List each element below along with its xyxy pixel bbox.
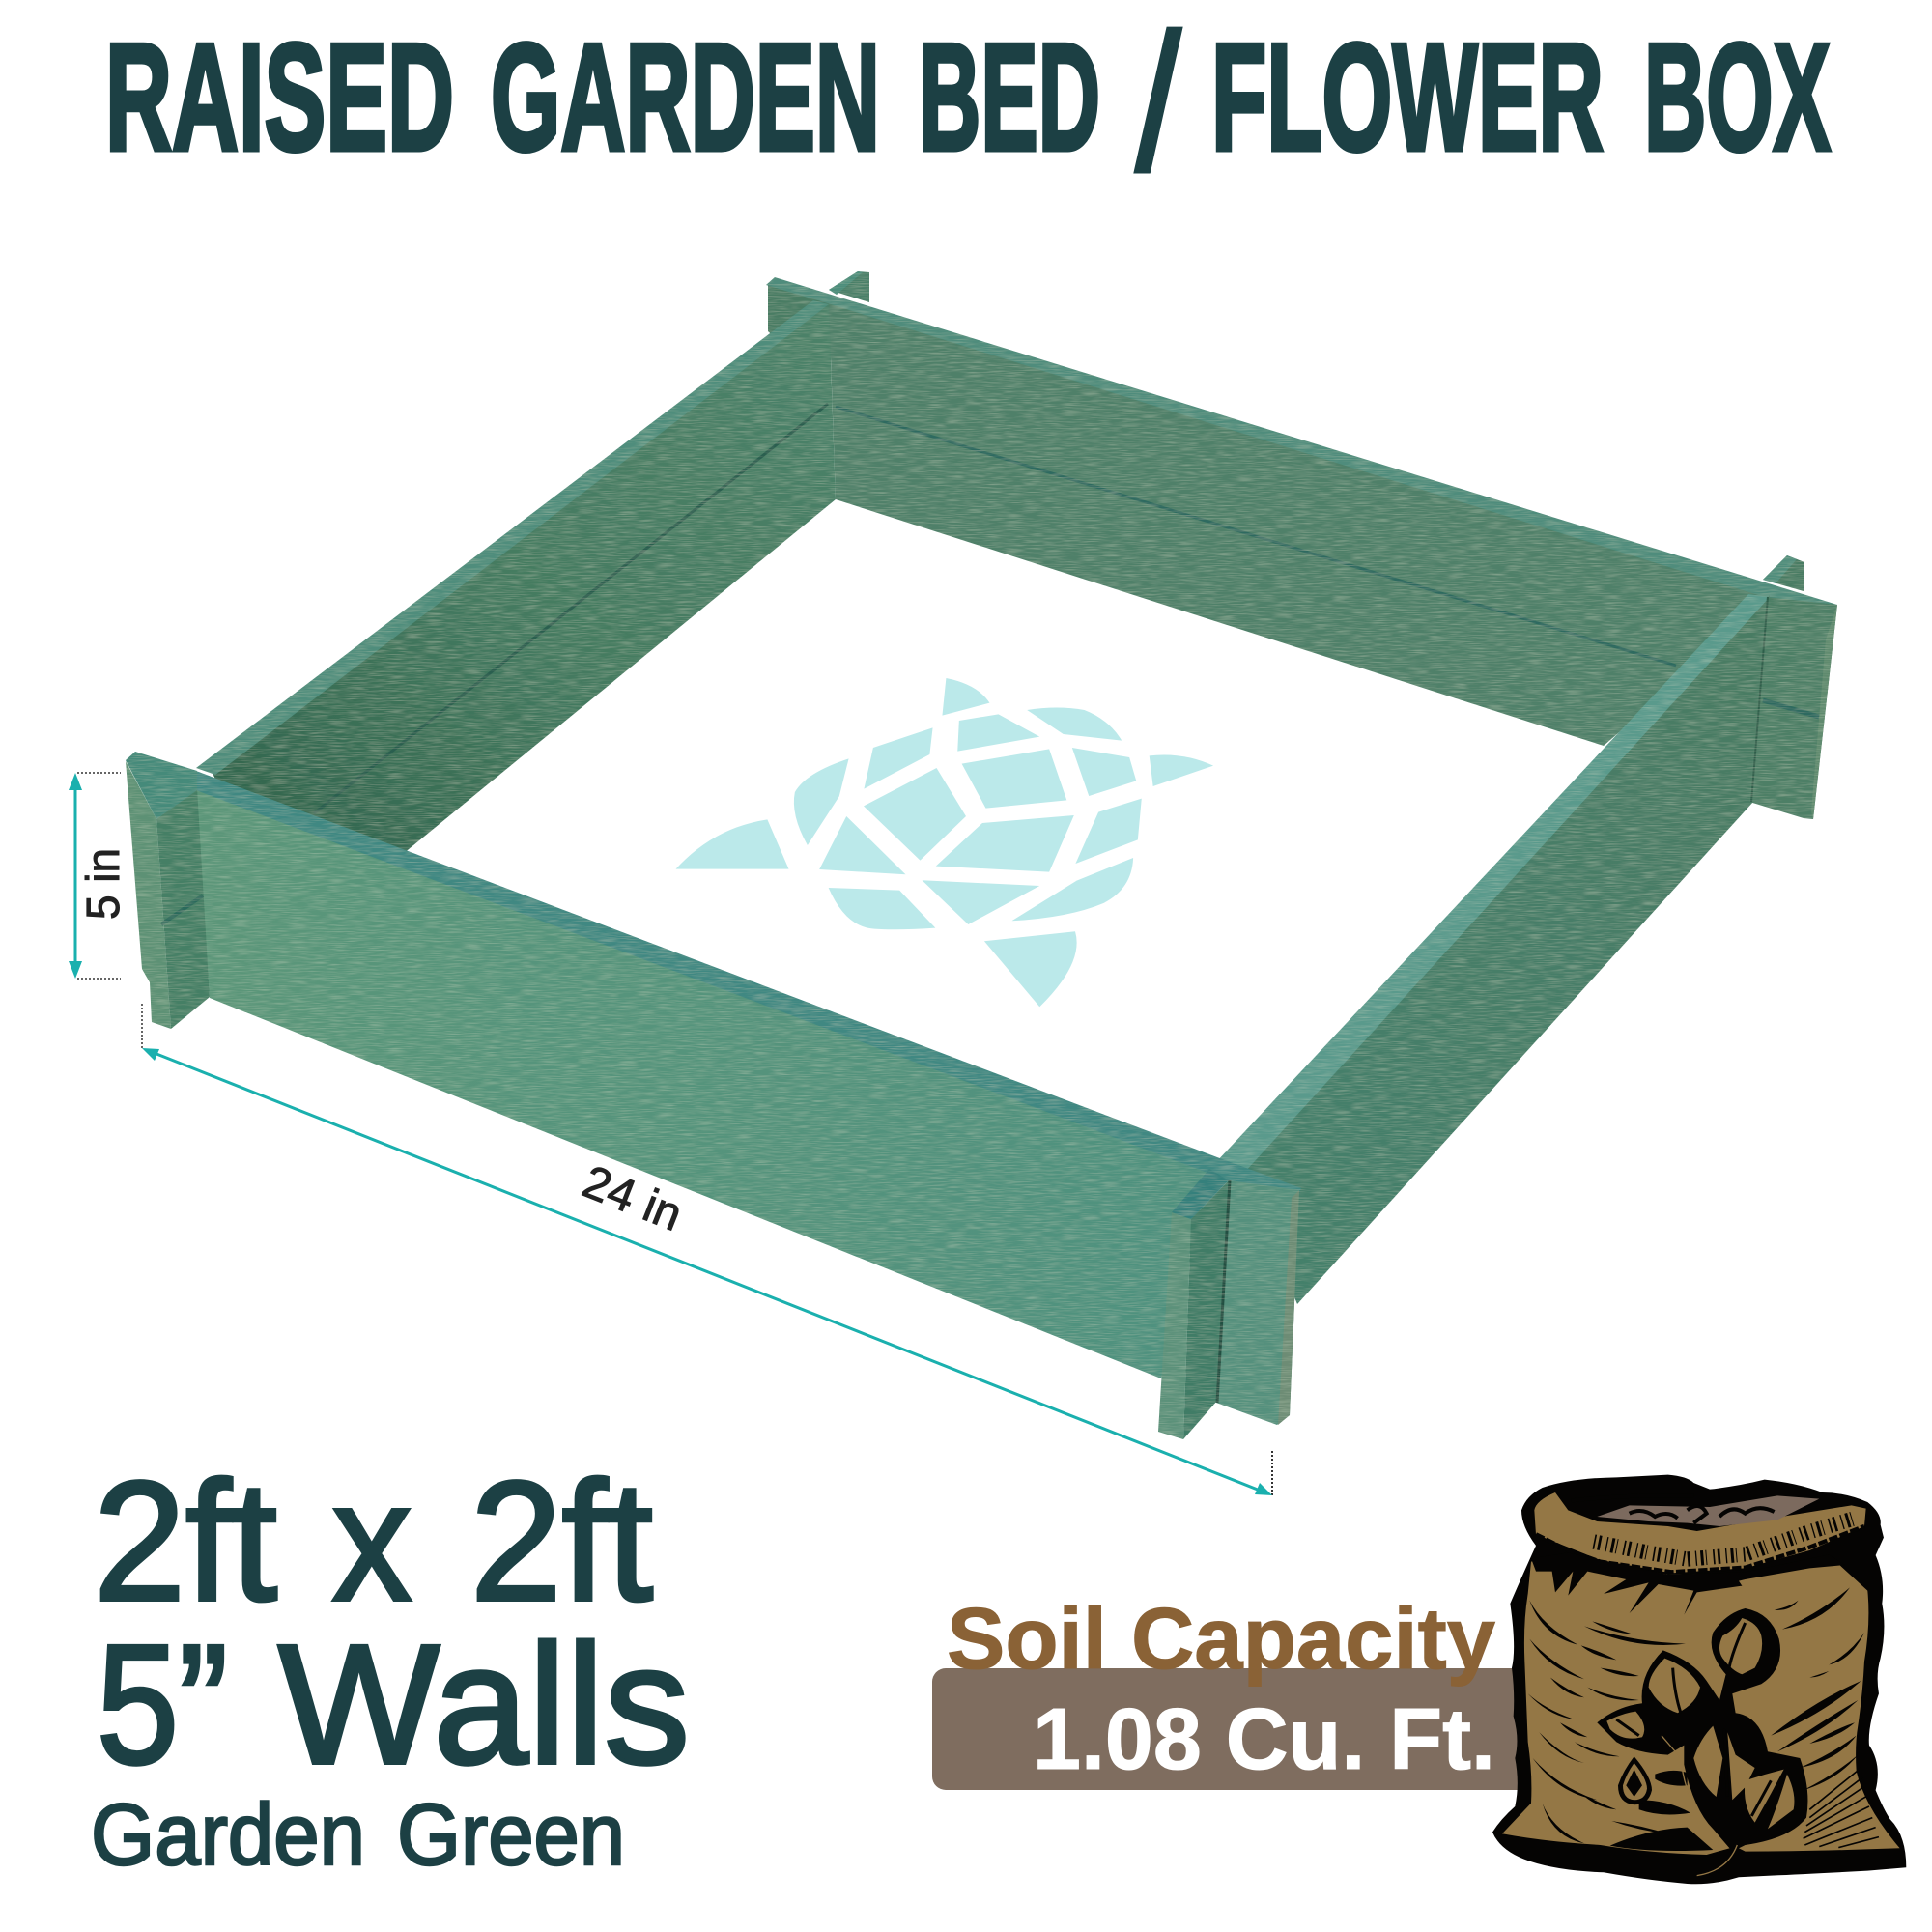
leaves [1597, 1608, 1807, 1876]
width dimension: 24 in: 24 in [576, 1156, 689, 1241]
title: GARDEN [491, 13, 880, 183]
size heading [94, 1447, 690, 1800]
right wall [1215, 594, 1770, 1304]
back corner stub [829, 271, 869, 302]
soil capacity label: Soil Capacity [947, 1591, 1495, 1688]
right end plate [1749, 597, 1837, 819]
front right post [1158, 1169, 1299, 1439]
size heading: 5” [97, 1610, 228, 1800]
title [105, 0, 1831, 211]
size heading: Walls [278, 1610, 690, 1800]
height dimension: 5 in [69, 773, 129, 979]
icon: soil sack [1492, 1475, 1906, 1884]
size heading: 2ft [470, 1447, 653, 1636]
rim hatching [1594, 1518, 1858, 1559]
sack outline [1492, 1475, 1906, 1884]
front wall [196, 771, 1301, 1378]
turtle logo [676, 678, 1213, 1007]
width dimension: 24 in [142, 1003, 1272, 1495]
rim stitching [1536, 1526, 1864, 1572]
soil clods [1572, 1495, 1775, 1523]
sack body [1502, 1555, 1900, 1855]
height dimension: 5 in: 5 in [78, 848, 129, 920]
soil capacity value: 1.08 Cu. Ft. [1033, 1691, 1495, 1788]
fold hatching [1528, 1552, 1864, 1851]
colour label: Garden [91, 1787, 365, 1884]
water drop [1618, 1756, 1652, 1804]
back wall [766, 277, 1837, 746]
sack rim [1534, 1492, 1866, 1573]
soil [1597, 1495, 1819, 1526]
colour label: Green [397, 1787, 625, 1884]
size heading: 2ft [94, 1447, 277, 1636]
title: FLOWER [1211, 13, 1604, 183]
soil capacity band [932, 1668, 1550, 1790]
left wall [196, 300, 836, 854]
front left post [126, 752, 210, 1029]
raised garden bed [126, 271, 1837, 1439]
right rear stub [1763, 555, 1804, 591]
size heading: x [332, 1447, 412, 1636]
title: BED [919, 13, 1100, 183]
colour label [91, 1787, 625, 1884]
shaded lower right hatching [1804, 1768, 1879, 1848]
title: RAISED [105, 13, 454, 183]
title: / [1136, 0, 1180, 211]
